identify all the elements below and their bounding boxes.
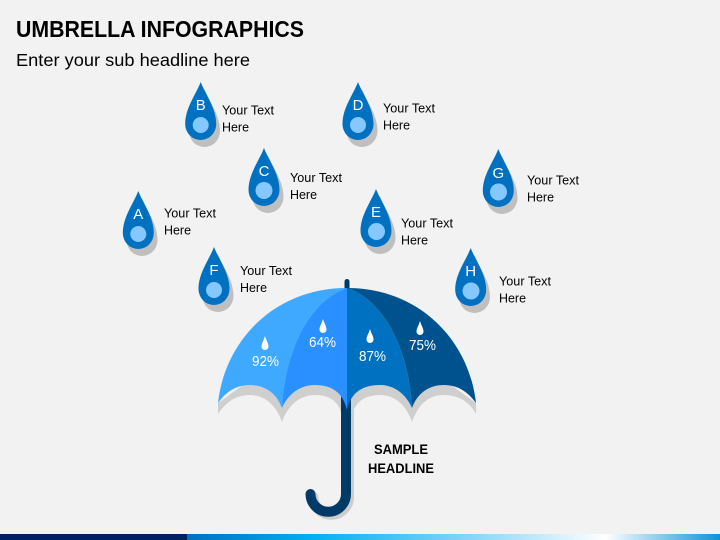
- label A: Your Text: [164, 206, 217, 220]
- canopy shadow: [218, 380, 476, 422]
- value 92%: 92%: [252, 353, 279, 370]
- value 64%: 64%: [309, 334, 336, 351]
- label A: Here: [164, 224, 191, 238]
- umbrella: [218, 279, 476, 515]
- sample headline: SAMPLE: [374, 442, 428, 457]
- handle shadow: [314, 400, 349, 515]
- panel 2: [282, 288, 347, 410]
- drop E: [360, 189, 396, 254]
- value 92%: [252, 336, 279, 370]
- handle: [310, 396, 346, 512]
- drop E: E: [371, 204, 381, 221]
- drop A: [123, 191, 158, 256]
- label H: Here: [499, 292, 526, 306]
- value 87%: [359, 329, 386, 365]
- value 64%: [309, 319, 336, 351]
- sample headline: HEADLINE: [368, 461, 434, 476]
- drop C: C: [259, 163, 270, 180]
- drop D: D: [353, 97, 364, 114]
- drop D: [342, 82, 378, 147]
- drop F: [198, 247, 234, 312]
- panel 4: [347, 288, 476, 408]
- label E: Here: [401, 234, 428, 248]
- drop F: F: [209, 262, 219, 279]
- value 87%: 87%: [359, 348, 386, 365]
- drop B: B: [196, 97, 206, 114]
- label D: Your Text: [383, 102, 436, 116]
- panel 1: [218, 288, 347, 408]
- label H: Your Text: [499, 275, 552, 289]
- drop C: [248, 148, 284, 213]
- label B: Your Text: [222, 104, 275, 118]
- label C: Your Text: [290, 171, 343, 185]
- value 75%: [409, 321, 436, 354]
- subtitle: Enter your sub headline here: [16, 50, 250, 70]
- drop G: G: [492, 165, 504, 182]
- value 75%: 75%: [409, 337, 436, 354]
- panel 3: [347, 288, 412, 410]
- drop H: [455, 248, 490, 313]
- drop G: [483, 149, 518, 214]
- drop B: [185, 82, 220, 147]
- ferrule: [344, 279, 350, 293]
- label G: Your Text: [527, 174, 580, 188]
- label C: Here: [290, 188, 317, 202]
- title: UMBRELLA INFOGRAPHICS: [16, 16, 304, 42]
- label B: Here: [222, 120, 249, 134]
- drop H: H: [465, 263, 476, 280]
- label E: Your Text: [401, 216, 454, 230]
- drop A: A: [133, 206, 143, 223]
- footer bar: [0, 534, 720, 540]
- label F: Here: [240, 281, 267, 295]
- label D: Here: [383, 118, 410, 132]
- label F: Your Text: [240, 264, 293, 278]
- label G: Here: [527, 190, 554, 204]
